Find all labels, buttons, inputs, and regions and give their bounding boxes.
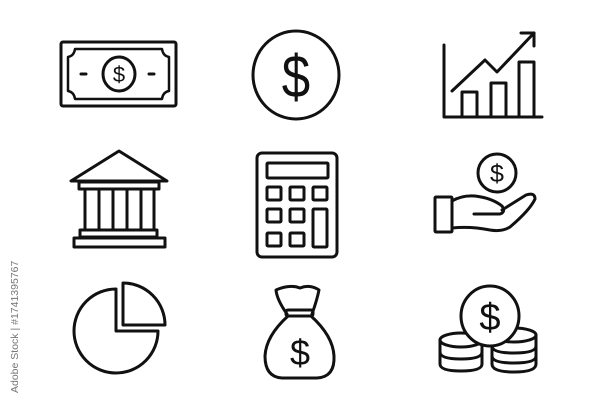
icon: hand holding coin: $	[490, 160, 504, 188]
icon: dollar coin: $	[282, 43, 310, 110]
icon: money bag	[265, 286, 334, 378]
icon: money bag: $	[290, 332, 310, 373]
icon: pie chart	[74, 283, 165, 373]
icon: coin stacks	[440, 286, 536, 372]
icon: calculator	[257, 153, 337, 257]
icon: banknote	[61, 42, 176, 106]
watermark text: Adobe Stock | #1741395767	[9, 261, 21, 393]
icon: bank	[71, 151, 167, 247]
icon: coin stacks: $	[479, 297, 501, 339]
icon: growth chart	[444, 33, 542, 117]
icon: dollar coin	[253, 31, 339, 119]
icon: banknote: $	[113, 62, 125, 87]
icon: hand holding coin	[435, 154, 535, 232]
